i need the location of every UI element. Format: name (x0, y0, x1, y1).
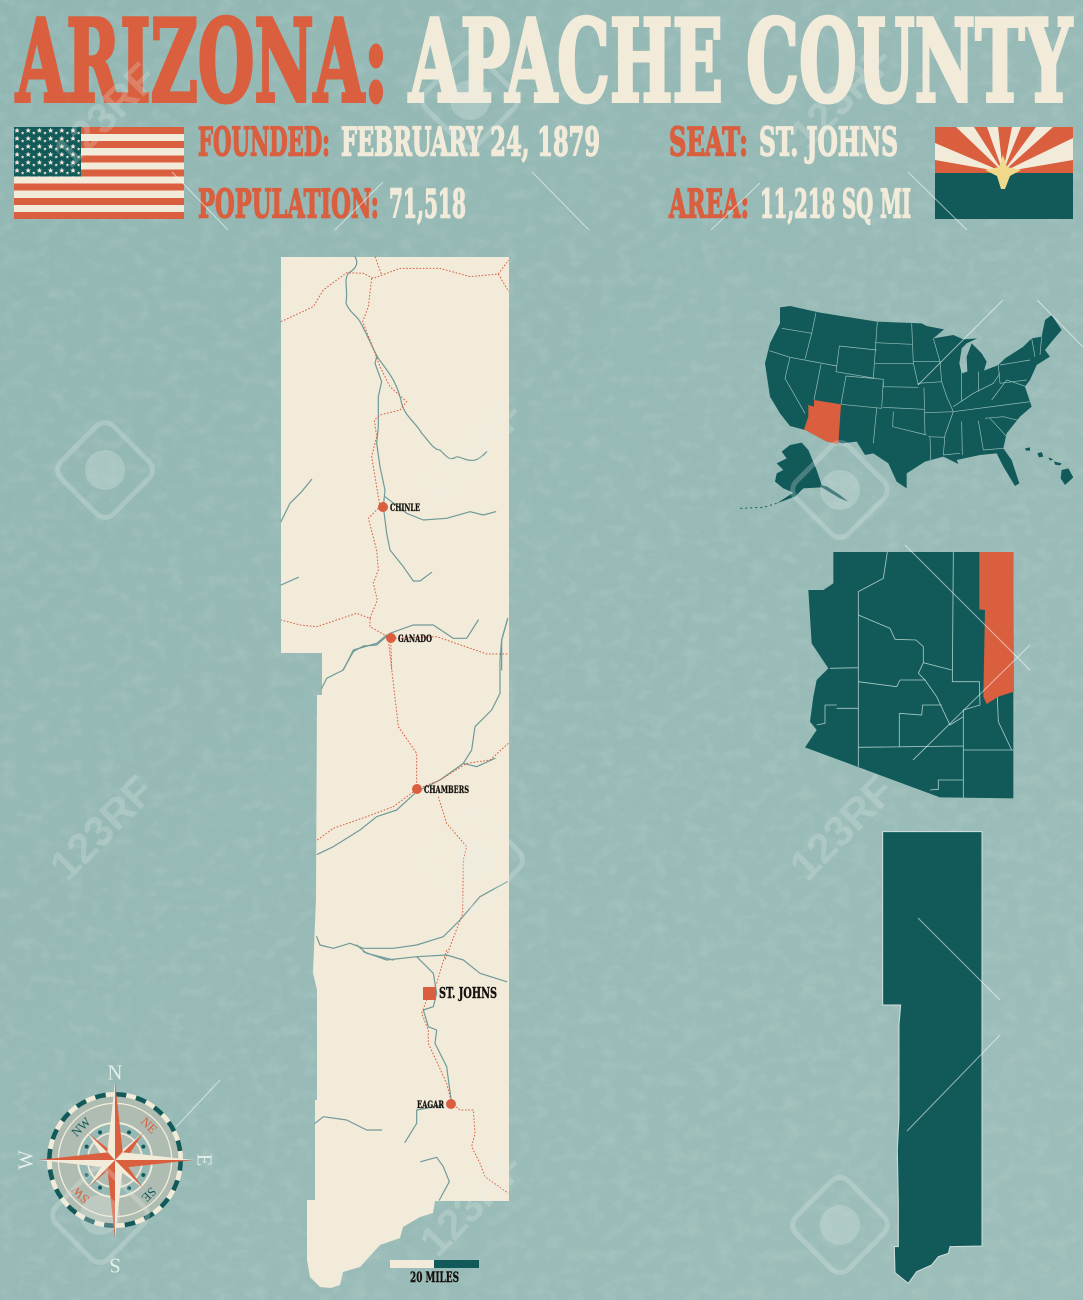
US map (740, 306, 1073, 508)
city: Eagar: EAGAR (417, 1099, 444, 1111)
population: POPULATION: (198, 182, 379, 228)
rivers middle (317, 620, 507, 960)
area: 11,218 SQ MI (760, 182, 911, 228)
scale bar (390, 1260, 479, 1286)
direction labels: SE (138, 1184, 159, 1205)
state shape (805, 552, 1013, 798)
watermarks: 123RF (781, 36, 903, 158)
Hawaii (1025, 447, 1073, 485)
roads upper (281, 257, 509, 669)
direction labels: W (16, 1150, 38, 1170)
roads middle (317, 640, 508, 960)
compass rose (16, 1062, 214, 1275)
direction labels: SW (69, 1183, 92, 1206)
area: AREA: (668, 182, 749, 228)
ring dots (85, 1130, 145, 1190)
direction labels (16, 1062, 214, 1275)
rivers lower (315, 952, 507, 1200)
city: Chambers (412, 784, 469, 796)
direction labels: NE (138, 1115, 160, 1137)
watermarks: 123RF (41, 767, 163, 889)
rivers upper (281, 257, 508, 670)
main points (38, 1082, 193, 1238)
direction labels: N (108, 1062, 123, 1084)
title (15, 0, 1073, 128)
state lines (769, 313, 1042, 460)
scale bar: 20 MILES (410, 1270, 459, 1286)
outer dashed ring (49, 1094, 181, 1226)
icon: Arizona flag (935, 127, 1073, 219)
roads lower (422, 950, 508, 1193)
watermarks: 123RF (781, 767, 903, 889)
direction labels: S (109, 1253, 121, 1275)
founded (198, 120, 600, 166)
city: St. Johns: ST. JOHNS (439, 985, 497, 1002)
Arizona state map (805, 552, 1014, 798)
watermarks: 123RF (411, 1143, 533, 1265)
Aleutian islands (740, 503, 777, 508)
main county map (281, 257, 509, 1288)
direction labels: NW (69, 1115, 94, 1140)
city: Ganado: GANADO (398, 633, 432, 645)
Arizona highlight (804, 400, 841, 444)
population: 71,518 (389, 182, 466, 228)
founded: FOUNDED: (198, 120, 330, 166)
watermarks: 123RF (411, 391, 533, 513)
direction labels: E (192, 1154, 214, 1166)
inner rings (58, 1103, 172, 1217)
city: Chambers: CHAMBERS (424, 784, 469, 796)
seat (669, 120, 898, 166)
founded: FEBRUARY 24, 1879 (341, 120, 600, 166)
city: Chinle: CHINLE (390, 502, 420, 514)
city: St. Johns (423, 985, 497, 1002)
county lines (817, 552, 1013, 798)
city: Chinle (378, 502, 420, 514)
watermarks (41, 36, 903, 1277)
Apache County highlight (979, 552, 1014, 704)
county silhouette (883, 832, 982, 1283)
seat: ST. JOHNS (759, 120, 898, 166)
area (668, 182, 911, 228)
county outline (281, 257, 509, 1288)
Alaska (775, 443, 848, 503)
seat: SEAT: (669, 120, 748, 166)
diagonal points (87, 1133, 143, 1188)
watermarks: 123RF (44, 54, 166, 176)
icon: US flag (14, 127, 184, 219)
contiguous states (765, 306, 1062, 488)
city: Ganado (386, 633, 432, 645)
